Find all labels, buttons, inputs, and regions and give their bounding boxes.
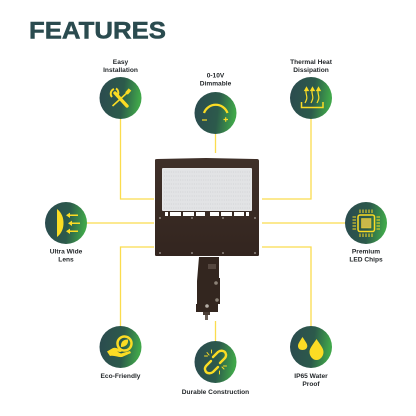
icon: chip (352, 210, 380, 237)
feature: easy installation (100, 59, 142, 119)
feature: 0-10V dimmable: 0-10V (207, 72, 225, 80)
icon: wrench and screwdriver (111, 88, 130, 106)
feature: premium LED chips: LED Chips (349, 256, 383, 264)
icon: water drops (298, 337, 324, 360)
feature: durable construction: Durable Construction (182, 389, 249, 396)
feature: IP65 water proof: IP65 Water (294, 373, 328, 380)
feature: ultra wide lens: Ultra Wide (50, 248, 83, 256)
feature: thermal heat dissipation: Dissipation (293, 67, 329, 74)
connector lines (87, 119, 345, 341)
feature: IP65 water proof (290, 326, 332, 388)
feature: easy installation: Easy (113, 59, 129, 66)
feature: thermal heat dissipation: Thermal Heat (290, 59, 333, 66)
feature: IP65 water proof: Proof (302, 381, 320, 388)
feature: 0-10V dimmable (194, 72, 236, 134)
icon: heat waves (302, 88, 323, 108)
feature: eco-friendly: Eco-Friendly (101, 373, 141, 380)
icon: hand holding leaf (107, 336, 132, 357)
feature: ultra wide lens (45, 202, 87, 264)
feature: thermal heat dissipation (290, 59, 333, 119)
feature: 0-10V dimmable: Dimmable (200, 80, 232, 88)
icon: dimmer arc (202, 105, 228, 122)
icon: broken chain link (204, 350, 226, 374)
product: area light fixture (155, 158, 259, 320)
icon: lens with arrows (57, 209, 80, 237)
feature: easy installation: Installation (103, 67, 138, 74)
feature: ultra wide lens: Lens (58, 256, 74, 264)
title: FEATURES (29, 18, 166, 44)
feature: durable construction (182, 341, 249, 396)
feature: premium LED chips: Premium (352, 248, 380, 256)
feature: eco-friendly (100, 326, 142, 380)
feature: premium LED chips (345, 202, 387, 264)
